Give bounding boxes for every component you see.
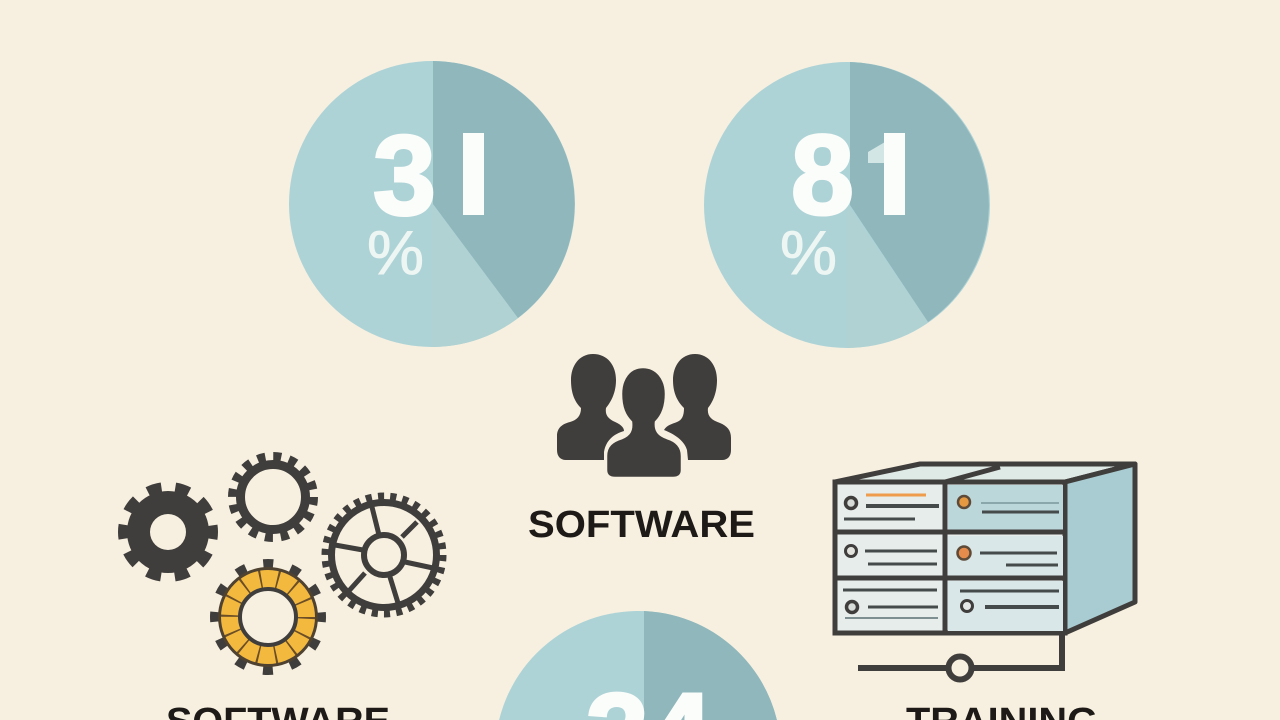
infographic canvas [118, 61, 1138, 720]
pie chart: 31 percent [289, 61, 575, 347]
icon: left person [557, 354, 624, 460]
icon: three people [557, 354, 731, 478]
icon: ring gear [232, 456, 314, 538]
pie chart: 81 percent: % [780, 219, 837, 288]
server drawer details [843, 495, 1059, 618]
pie chart: 34 percent [495, 611, 781, 720]
pie chart: 81 percent: 8 [791, 112, 854, 238]
server top [835, 464, 1135, 482]
icon: yellow gear [215, 564, 321, 670]
icon: server cabinet [835, 464, 1135, 680]
server side [1065, 464, 1135, 633]
server connector [858, 633, 1062, 668]
pie chart: 31 percent: % [367, 219, 424, 288]
icon: spoked gear [326, 497, 442, 613]
icon: solid gear [124, 488, 212, 576]
icon: centre person [606, 367, 682, 478]
server front [835, 482, 1065, 633]
pie chart: 81 percent: 1 [851, 112, 914, 238]
pie chart: 31 percent: 3 [373, 112, 436, 238]
pie chart: 31 percent: 1 [430, 112, 493, 238]
label: software centre: SOFTWARE [528, 504, 755, 546]
icon: right person [664, 354, 731, 460]
pie chart: 81 percent [704, 62, 990, 348]
